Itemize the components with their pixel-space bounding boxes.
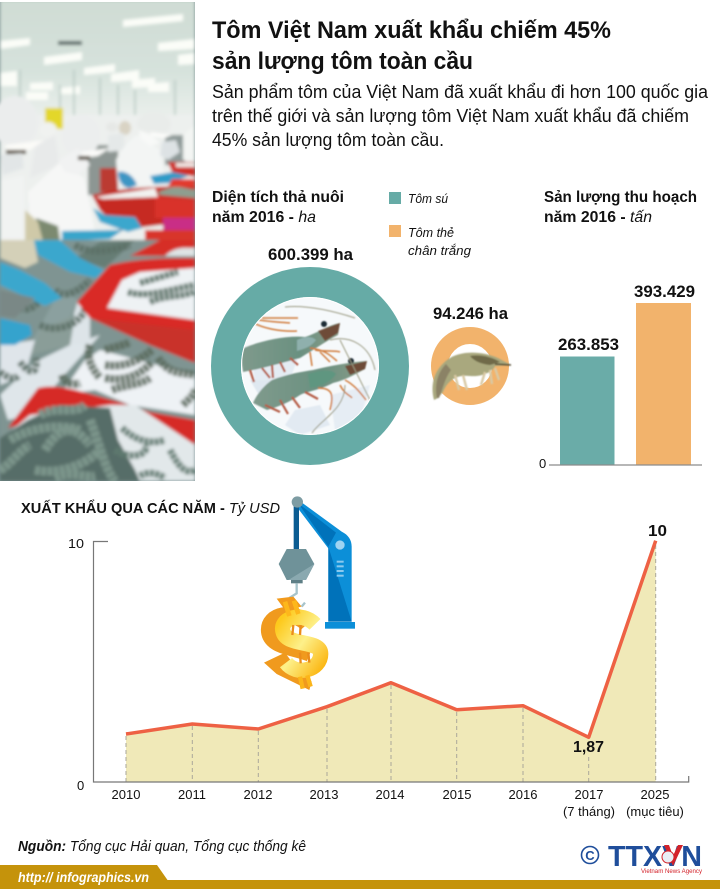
line chart: export value: 2016 [509,787,537,802]
line chart: export value: 2014 [376,787,404,802]
dollar sign [264,597,321,690]
ice under shrimp pile [60,350,195,415]
upper shrimp [240,323,340,372]
heading: farming area: Diện tích thả nuôi [212,189,344,206]
bar chart: harvest output: 263.853 [558,335,619,354]
lower table [1,237,195,428]
value label: 94.246 ha: 94.246 ha [433,304,509,323]
line chart: export value: 2011 [178,787,206,802]
logo: TTXVN: Vietnam News Agency [641,868,703,875]
heading: harvest output [544,189,697,226]
line chart: export value: 2025 [641,787,669,802]
data line [126,541,656,737]
heading: harvest output: Sản lượng thu hoạch [544,189,697,206]
heading: harvest output: năm 2016 - tấn [544,209,652,226]
photo: shrimp processing workers [0,0,195,481]
intro text block: Sản phẩm tôm của Việt Nam đã xuất khẩu đi hơn 100 quốc gia [212,81,709,102]
bar chart: harvest output [539,282,702,471]
legend: Tôm thẻ [408,225,454,240]
heading: farming area: năm 2016 - ha [212,209,316,226]
legend [389,191,472,258]
intro text block [212,81,709,150]
line chart: export value: 0 [77,778,84,793]
line chart: export value: 10 [648,523,667,540]
bottom shrimp pile [0,405,195,481]
logo: TTXVN: C [585,848,595,863]
line chart: export value: (7 tháng) [563,804,615,819]
crane weight [279,549,314,580]
title: Tôm Việt Nam xuất khẩu chiếm 45% [212,17,611,44]
value label: 600.399 ha: 600.399 ha [268,245,354,264]
logo: TTXVN: TTXVN [608,841,702,873]
line chart: export value: 2015 [443,787,471,802]
title [212,17,611,75]
heading: farming area [212,189,344,226]
worker right [114,156,121,184]
blue gloves lower [33,240,104,278]
ring: black tiger shrimp area [226,282,394,450]
area fill [126,541,656,782]
red basket top right [130,240,195,256]
red basket middle [77,258,195,363]
far workers [42,119,59,132]
title: sản lượng tôm toàn cầu [212,48,473,75]
line chart: export value: 2017 [575,787,603,802]
ring: white-leg shrimp area [433,336,511,400]
line chart: export value: (mục tiêu) [626,804,684,819]
line chart: export value: 2012 [244,787,272,802]
bar chart: harvest output: 393.429 [634,282,695,301]
line chart: export value: 2010 [112,787,140,802]
lower shrimp [253,361,367,410]
red basket bottom [8,386,195,450]
center worker gloves [93,208,142,232]
footer band with url [0,865,720,889]
heading: exports by year: XUẤT KHẨU QUA CÁC NĂM - Tỷ USD [21,499,280,517]
worker center [30,166,92,230]
upper right baskets [168,162,195,177]
intro text block: trên thế giới và sản lượng tôm Việt Nam xuất khẩu đã chiếm [212,105,689,126]
legend: chân trắng [408,243,472,258]
factory mid background [0,115,195,240]
line chart: export value: 2013 [310,787,338,802]
crane arm [279,496,355,629]
line chart: export value: 10 [68,536,84,551]
source note: Nguồn: Tổng cục Hải quan, Tổng cục thống kê [18,839,306,855]
icon: crane lifting a dollar sign [264,496,355,690]
footer band with url: http:// infographics.vn [18,869,149,885]
bar chart: harvest output: 0 [539,456,546,471]
legend: Tôm sú [408,191,448,206]
intro text block: 45% sản lượng tôm toàn cầu. [212,129,444,150]
worker left [0,175,26,240]
line chart: export value: 1,87 [573,739,604,756]
line chart: export value [68,523,689,819]
